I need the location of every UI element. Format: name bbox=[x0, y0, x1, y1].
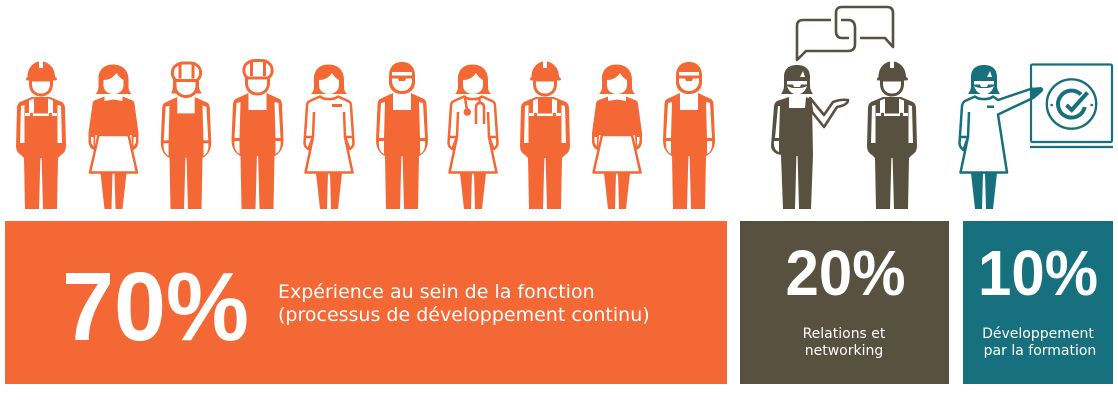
value: 20%: 20% bbox=[786, 237, 906, 309]
description: development through training: Développement bbox=[982, 326, 1094, 342]
figure: worker with hard hat bbox=[520, 62, 570, 209]
figure: trainer pointing at board bbox=[960, 65, 1043, 209]
description: relations and networking: Relations et bbox=[803, 326, 886, 342]
description: development through training: par la formation bbox=[984, 343, 1096, 359]
figure: woman in overalls gesturing bbox=[771, 65, 848, 209]
value: 10%: 10% bbox=[978, 237, 1098, 309]
figure: man with face mask bbox=[663, 62, 715, 209]
figure: nurse bbox=[304, 64, 354, 209]
panel: 10 percent bbox=[963, 221, 1113, 384]
icon: board with check mark bbox=[1030, 64, 1113, 147]
panel: 20 percent bbox=[740, 221, 949, 384]
value: 70%: 70% bbox=[62, 252, 249, 361]
description: on-the-job experience: (processus de développement continu) bbox=[278, 304, 650, 326]
panel: 70 percent bbox=[5, 221, 727, 384]
figure: woman in overalls with helmet bbox=[161, 63, 211, 209]
description: relations and networking: networking bbox=[805, 343, 883, 359]
figure: woman in skirt bbox=[88, 64, 138, 209]
figure: man with face mask bbox=[376, 62, 428, 209]
figure: worker with hard hat bbox=[867, 62, 917, 209]
figure: doctor with stethoscope bbox=[448, 64, 498, 209]
speech bubbles icon bbox=[797, 7, 893, 60]
figure: man in overalls with helmet bbox=[232, 60, 284, 209]
description: on-the-job experience: Expérience au sein de la fonction bbox=[278, 281, 595, 303]
figure: worker with hard hat bbox=[16, 62, 66, 209]
orange figures row bbox=[16, 60, 715, 209]
figure: woman in skirt bbox=[592, 64, 642, 209]
